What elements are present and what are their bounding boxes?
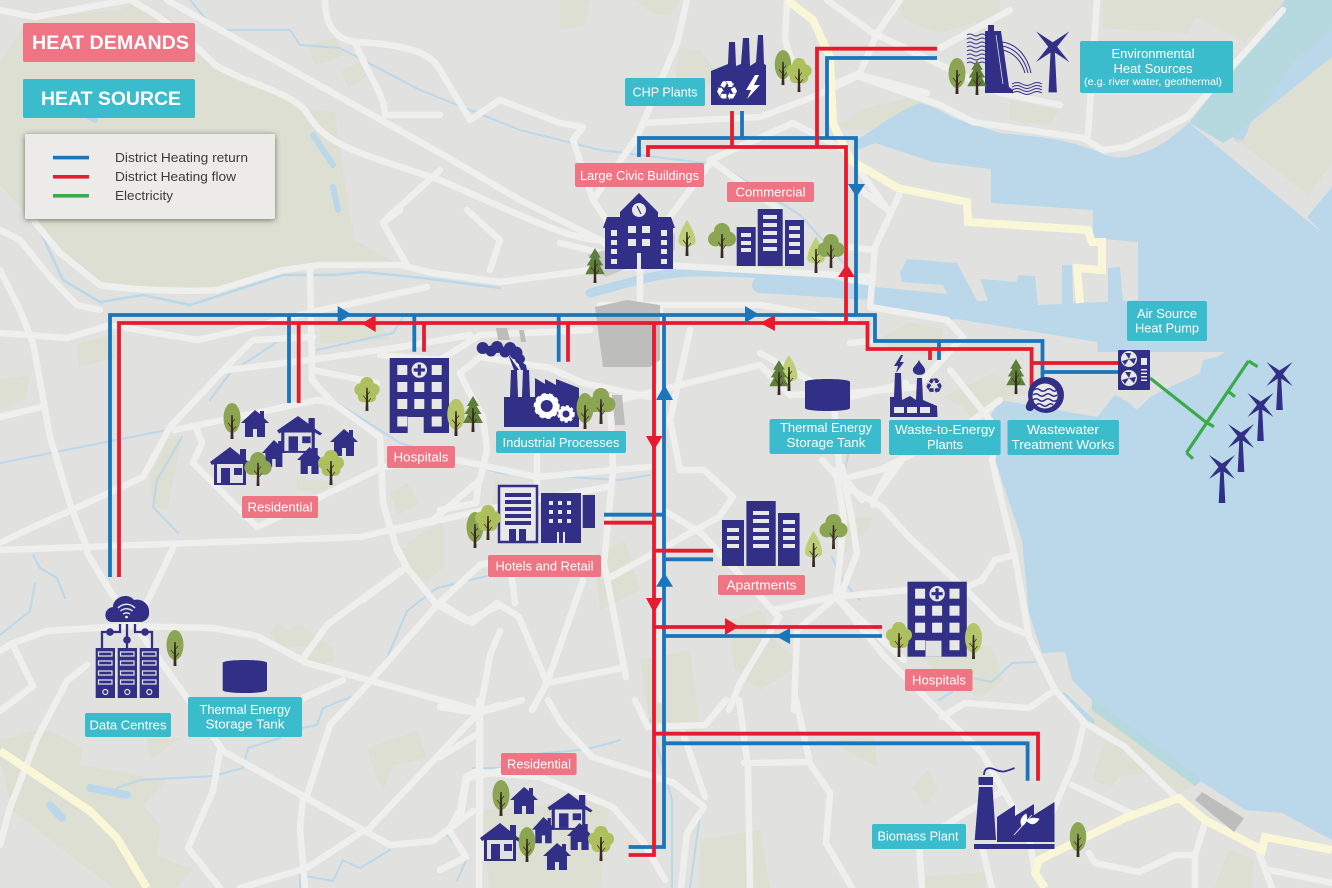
electricity line — [1150, 361, 1258, 459]
label: Data Centres — [85, 713, 171, 737]
label: Hospitals east: Hospitals — [912, 674, 966, 688]
label: Commercial: Commercial — [736, 186, 806, 200]
icon: hotels and retail — [466, 486, 595, 548]
label: Hotels and Retail — [488, 555, 601, 577]
icon: offshore wind turbines — [1209, 362, 1292, 503]
label: CHP Plants — [625, 78, 705, 106]
label: Air Source Heat Pump: Heat Pump — [1135, 322, 1199, 336]
label: Biomass Plant: Biomass Plant — [878, 830, 959, 844]
label: CHP Plants: CHP Plants — [632, 86, 698, 100]
heading: heat source: HEAT SOURCE — [41, 89, 181, 110]
legend — [25, 134, 275, 219]
label: Commercial — [727, 182, 814, 202]
label: Apartments — [718, 575, 805, 595]
icon: residential houses south — [480, 780, 614, 870]
label: Environmental Heat Sources — [1080, 41, 1233, 93]
label: Environmental Heat Sources: Environmental — [1112, 47, 1194, 61]
label: Air Source Heat Pump: Air Source — [1137, 307, 1197, 321]
label: Residential south: Residential — [507, 758, 571, 772]
label: Apartments: Apartments — [726, 578, 796, 592]
heading: heat source — [23, 79, 195, 118]
label: Large Civic Buildings: Large Civic Buildings — [580, 169, 699, 183]
icon: data centres — [96, 596, 184, 698]
water — [857, 0, 1332, 840]
label: Thermal Energy Storage Tank west — [188, 697, 302, 737]
icon: wastewater treatment works — [1006, 359, 1064, 413]
label: Hotels and Retail: Hotels and Retail — [496, 560, 594, 574]
label: Thermal Energy Storage Tank west: Storage Tank — [206, 718, 285, 732]
icon: residential houses west — [210, 403, 358, 486]
label: Large Civic Buildings — [575, 163, 704, 187]
heading: heat demands — [23, 23, 195, 62]
label: Industrial Processes: Industrial Processes — [502, 436, 620, 450]
legend: District Heating return — [115, 151, 248, 165]
label: Thermal Energy Storage Tank: Thermal Energy — [780, 421, 873, 435]
land: port and Bull Island — [845, 143, 1138, 305]
icon: CHP plant: ♻ — [715, 76, 739, 107]
label: Wastewater Treatment Works: Wastewater — [1027, 423, 1099, 437]
label: Thermal Energy Storage Tank west: Thermal Energy — [200, 703, 291, 717]
legend: District Heating flow — [115, 170, 237, 184]
flow direction arrows — [338, 184, 865, 644]
label: Thermal Energy Storage Tank: Storage Tank — [786, 436, 866, 450]
grey urban blocks — [496, 233, 1244, 832]
icon: hospital — [354, 358, 483, 436]
label: Data Centres: Data Centres — [90, 718, 166, 732]
label: Wastewater Treatment Works — [1008, 420, 1119, 455]
label: Residential: Residential — [248, 500, 312, 514]
label: Hospitals — [387, 446, 455, 468]
icon: environmental heat sources — [948, 25, 1069, 95]
label: Biomass Plant — [872, 824, 966, 849]
icon: waste-to-energy plant — [890, 355, 943, 417]
label: Environmental Heat Sources: (e.g. river water, geothermal) — [1084, 77, 1222, 88]
icon: hospital east — [886, 582, 982, 659]
district heating flow — [119, 49, 1119, 855]
label: Residential south — [501, 753, 577, 775]
label: Hospitals: Hospitals — [394, 450, 448, 464]
icon: biomass plant — [974, 768, 1086, 857]
icon: CHP plant — [711, 35, 812, 107]
icon: apartments — [722, 501, 848, 567]
icon: commercial buildings — [708, 209, 845, 273]
label: Air Source Heat Pump — [1127, 301, 1207, 341]
legend: Electricity — [115, 189, 174, 203]
label: Waste-to-Energy Plants — [889, 420, 1001, 455]
icon: air source heat pump — [1118, 350, 1150, 390]
icon: thermal energy storage tank west — [223, 660, 267, 693]
district heating return — [110, 58, 1119, 847]
icon: industrial processes — [477, 341, 615, 429]
label: Residential — [242, 496, 318, 518]
heading: heat demands: HEAT DEMANDS — [32, 33, 189, 54]
label: Wastewater Treatment Works: Treatment Works — [1012, 438, 1114, 452]
icon: thermal energy storage tank — [769, 355, 850, 411]
icon: large civic building — [585, 193, 696, 283]
label: Thermal Energy Storage Tank — [770, 419, 881, 454]
label: Waste-to-Energy Plants: Plants — [927, 438, 963, 452]
network pipes — [110, 49, 1258, 855]
label: Environmental Heat Sources: Heat Sources — [1114, 62, 1192, 76]
label: Industrial Processes — [496, 431, 626, 453]
label: Hospitals east — [905, 669, 972, 691]
label: Waste-to-Energy Plants: Waste-to-Energy — [895, 423, 996, 437]
icon: waste-to-energy plant: ♻ — [925, 374, 943, 398]
